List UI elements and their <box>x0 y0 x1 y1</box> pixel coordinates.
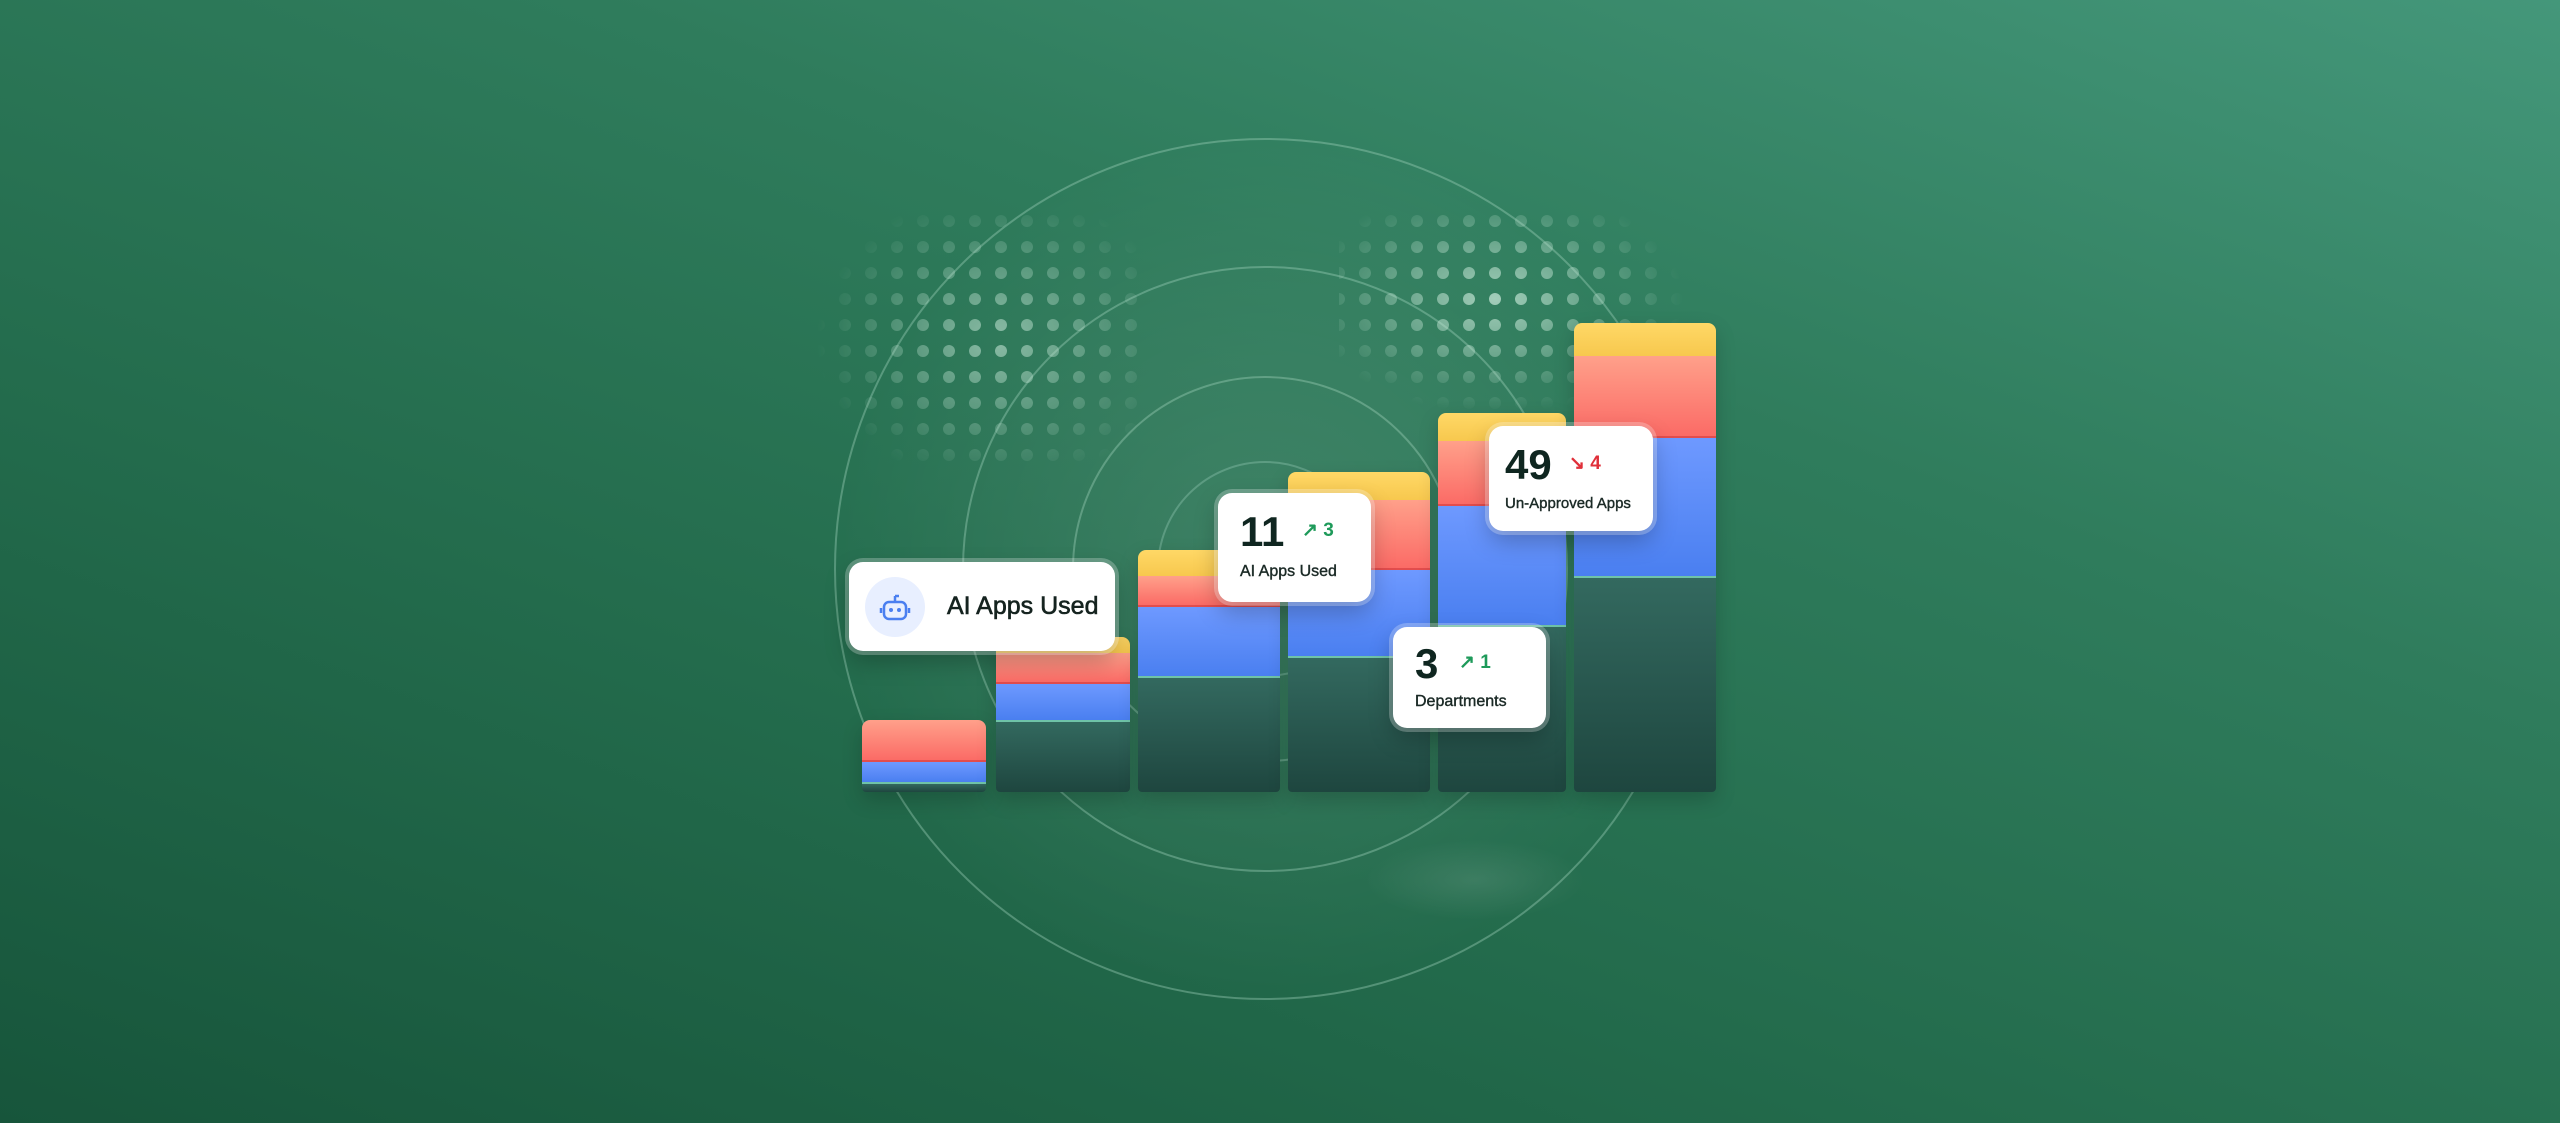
bar 6 <box>1574 323 1716 792</box>
bar 2 <box>996 637 1130 792</box>
card: 11 AI Apps Used: AI Apps Used <box>1240 563 1337 580</box>
icon: robot <box>865 577 925 637</box>
bar 3 <box>1138 550 1280 792</box>
card: 49 Un-Approved Apps: 49 <box>1505 441 1552 488</box>
card: 11 AI Apps Used: 11 <box>1240 508 1284 555</box>
card: 3 Departments: 3 <box>1415 640 1438 687</box>
bar 5 <box>1438 413 1566 792</box>
card: 11 AI Apps Used <box>1218 493 1371 602</box>
card: 3 Departments <box>1393 627 1546 728</box>
card: 49 Un-Approved Apps: Un-Approved Apps <box>1505 495 1631 512</box>
delta up 3: ↗ 3 <box>1302 520 1334 541</box>
background rings <box>834 138 1657 1000</box>
label: AI Apps Used <box>947 592 1098 620</box>
card: AI Apps Used header <box>849 562 1115 651</box>
delta up 1: ↗ 1 <box>1459 652 1491 673</box>
bar 1 <box>862 720 986 792</box>
delta down 4: ↘ 4 <box>1569 453 1601 474</box>
card: 49 Un-Approved Apps <box>1489 426 1653 531</box>
card: 3 Departments: Departments <box>1415 693 1507 710</box>
bar 4 <box>1288 472 1430 792</box>
